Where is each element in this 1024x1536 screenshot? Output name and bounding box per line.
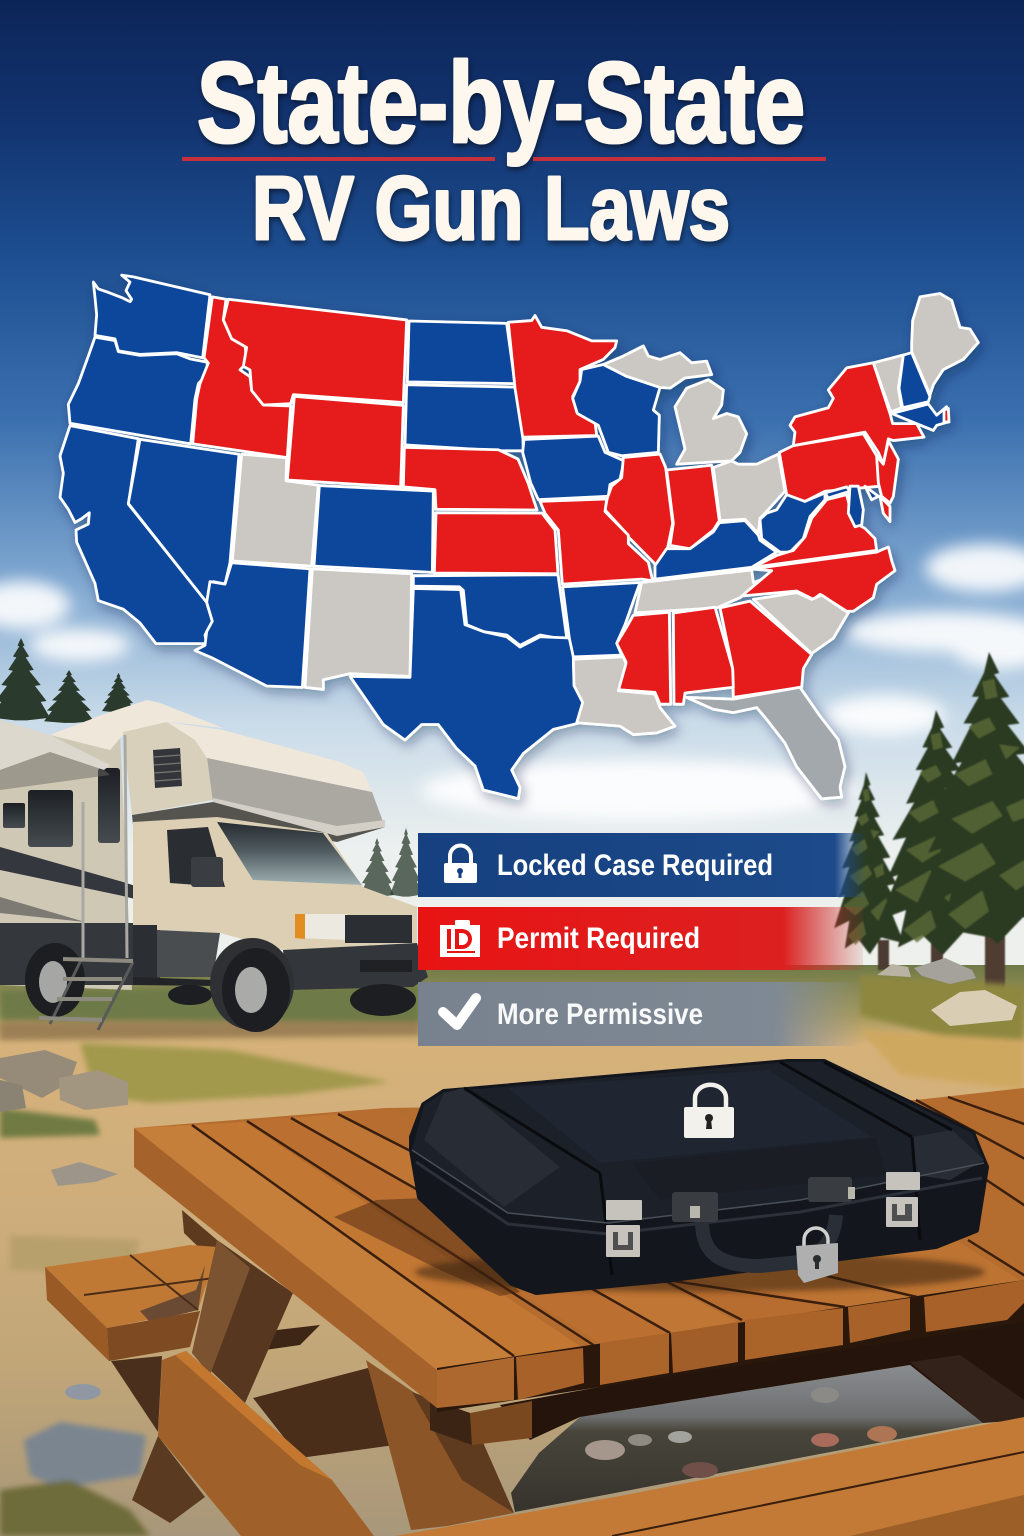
state: Louisiana [573, 657, 675, 735]
end plank long side [134, 1128, 437, 1408]
state: North Dakota [407, 321, 515, 384]
state: Iowa [523, 436, 624, 500]
state: Minnesota [508, 315, 617, 437]
state: Illinois [605, 454, 673, 566]
plank seams [192, 1097, 1024, 1356]
state: Florida [687, 687, 845, 799]
grass and dirt patches [0, 975, 1024, 1536]
map of united states [60, 275, 978, 799]
state: California [60, 426, 212, 644]
state: Maine [912, 294, 978, 395]
state: Washington [93, 275, 210, 358]
state: Arkansas [563, 583, 640, 657]
far leg and dark beams under table [182, 1210, 1024, 1458]
right hand tree group [834, 652, 1024, 992]
state: Alabama [673, 607, 733, 704]
state: Maryland east [865, 486, 878, 500]
legend row: permit required [418, 907, 863, 970]
ground [0, 965, 1024, 1536]
state: Mississippi [617, 612, 671, 704]
legend row: more permissive [418, 982, 863, 1046]
state: North Carolina [742, 547, 895, 611]
state: South Carolina [753, 593, 848, 653]
rv wheels [25, 938, 416, 1032]
state: Vermont [873, 355, 903, 412]
legend [418, 833, 866, 1046]
right leg and block [366, 1360, 532, 1530]
state: Maryland central [848, 486, 863, 527]
state: New Jersey [877, 441, 898, 503]
state: Kansas [434, 513, 558, 574]
state: Maryland west [825, 487, 850, 498]
state: Wyoming [287, 396, 403, 487]
background trees [0, 638, 422, 897]
state: Tennessee [635, 570, 763, 613]
legend row: locked case required: Locked Case Required [497, 849, 773, 882]
state: Wisconsin [573, 364, 660, 456]
case body [412, 1062, 986, 1292]
state: Indiana [667, 465, 719, 549]
legend row: more permissive: More Permissive [497, 998, 703, 1031]
case handle [702, 1215, 836, 1266]
state: West Virginia [760, 493, 825, 552]
plank top faces [134, 1125, 514, 1370]
title: State-by-State [197, 40, 805, 167]
state: Rhode Island [944, 408, 949, 422]
state: Massachusetts [892, 404, 948, 430]
rv roof and awning [0, 700, 223, 790]
state: Delaware [880, 496, 890, 522]
title [182, 40, 826, 259]
rv cab [133, 817, 428, 990]
state: Pennsylvania [779, 434, 880, 501]
rv rear body [0, 720, 240, 990]
state: Arizona [195, 563, 310, 687]
upright leg and brace [111, 1240, 374, 1536]
state: Montana [223, 299, 407, 405]
picnic table [45, 1088, 1024, 1536]
rv cab-over section [123, 722, 385, 842]
dark gaps between plank ends [437, 1280, 1024, 1412]
state: Utah [232, 454, 318, 566]
state: Michigan lower peninsula [675, 380, 747, 464]
state: Texas [350, 589, 583, 799]
state: Kentucky [655, 521, 777, 579]
state: New Hampshire [899, 353, 930, 408]
legend row: locked case required [418, 833, 866, 897]
state: New York and Connecticut [790, 363, 924, 464]
state: Missouri [540, 499, 653, 584]
state: South Dakota [405, 385, 523, 451]
state: Virginia [753, 495, 877, 567]
state: Oklahoma [413, 575, 567, 645]
rv motorhome [0, 700, 428, 1032]
state: Ohio [713, 454, 785, 534]
rocks [0, 958, 1017, 1400]
icon: padlock on case lid [684, 1085, 734, 1138]
state: Nebraska [403, 447, 537, 510]
plank end faces [437, 1357, 514, 1408]
clouds [0, 544, 1024, 820]
case latches [606, 1172, 920, 1257]
state: New Mexico [305, 569, 412, 689]
right bench [395, 1417, 1024, 1536]
rv entry steps [39, 735, 133, 1030]
state: Oregon [68, 337, 207, 444]
shadow on planks [334, 1198, 520, 1296]
case lid [412, 1062, 984, 1223]
sky background [0, 0, 1024, 1000]
locked gun case [412, 1062, 986, 1292]
ground seen beneath the table [511, 1365, 983, 1512]
left bench [45, 1245, 219, 1361]
legend row: permit required: Permit Required [497, 922, 700, 955]
state: Michigan upper peninsula [603, 346, 712, 388]
state: Georgia [720, 601, 812, 697]
table top [134, 1088, 1024, 1412]
state: Nevada [128, 439, 239, 602]
icon: hanging padlock [796, 1228, 838, 1283]
state: Colorado [314, 486, 433, 572]
state: Idaho [193, 297, 291, 458]
title: RV Gun Laws [252, 159, 730, 259]
